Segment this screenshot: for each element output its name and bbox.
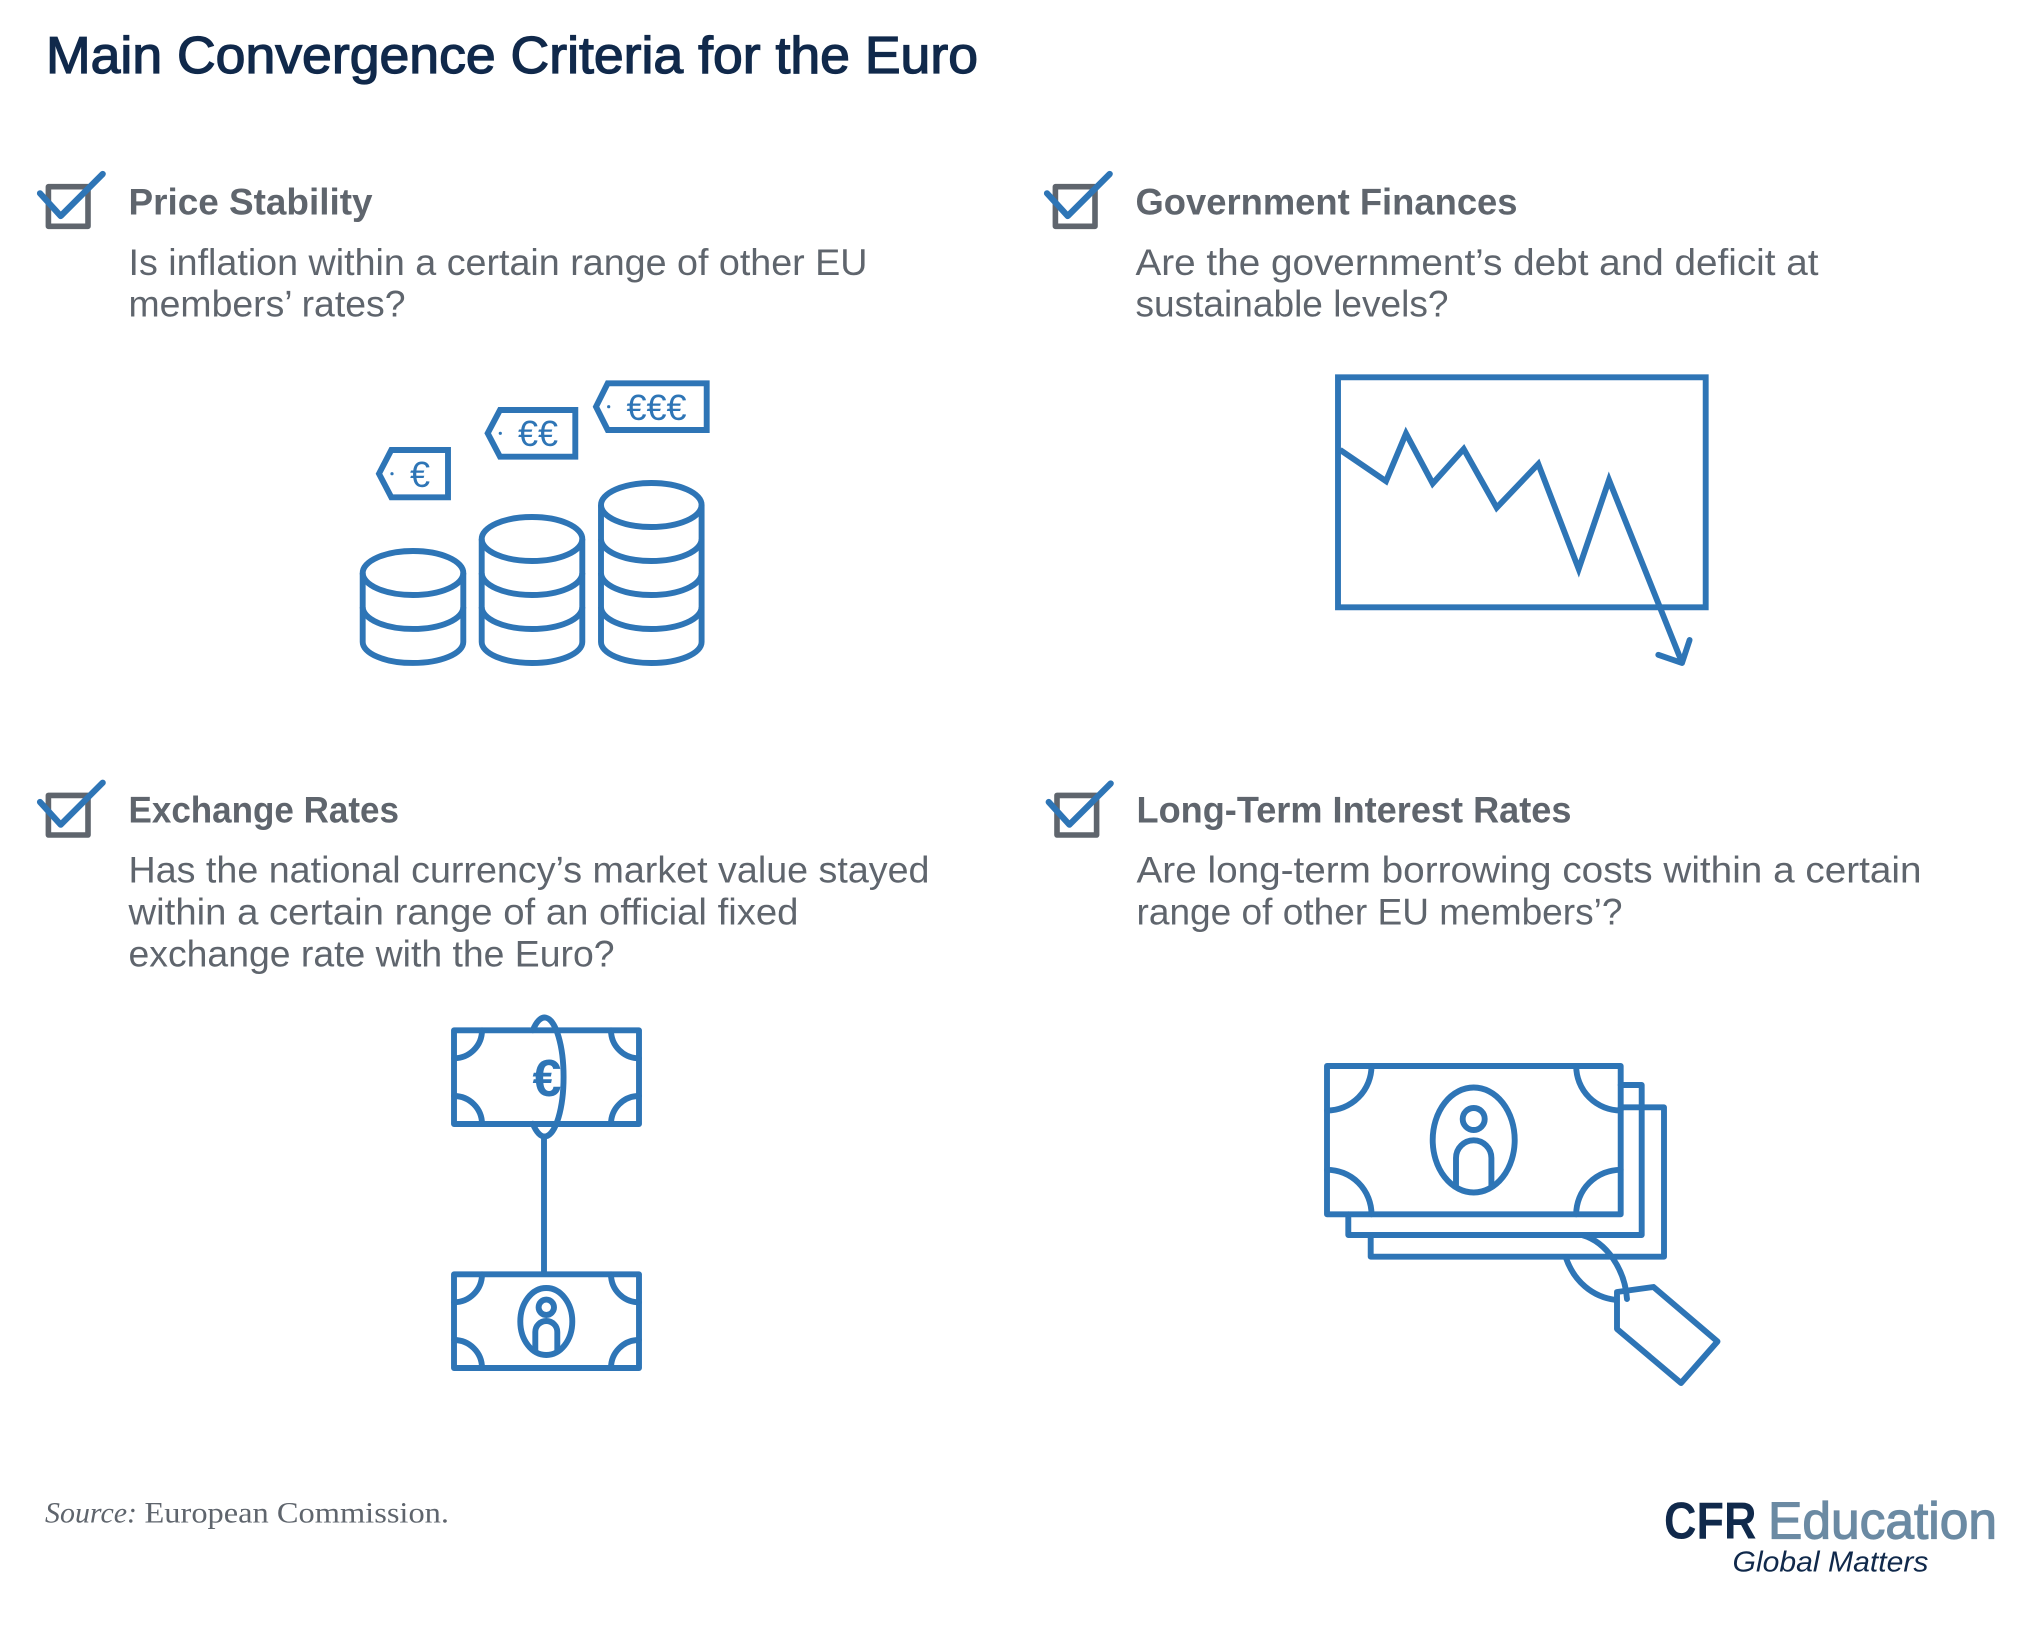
source note: European Commission. <box>144 1497 449 1530</box>
heading: price stability: Price Stability <box>128 181 373 222</box>
text block: price stability question <box>128 242 868 325</box>
source note: Source: <box>45 1497 137 1530</box>
source note <box>45 1497 449 1530</box>
panel: government finances <box>1047 174 1819 663</box>
logo: CFR Education Global Matters: Global Matters <box>1732 1547 1928 1579</box>
text block: exchange rates question: exchange rate with the Euro? <box>128 934 614 974</box>
icon: checkbox <box>1049 784 1111 835</box>
icon: one euro tag: € <box>410 454 430 495</box>
chart icon: falling line with arrow <box>1338 377 1706 663</box>
title: Main Convergence Criteria for the Euro <box>46 27 978 85</box>
icon: checkbox <box>1047 174 1110 226</box>
logo: CFR Education Global Matters: Education <box>1768 1492 1997 1550</box>
logo: CFR Education Global Matters: CFR <box>1664 1492 1756 1550</box>
icon: tall coin stack <box>601 483 702 663</box>
panel: long-term interest rates <box>1049 784 1922 1383</box>
text block: exchange rates question: Has the national currency’s market value stayed <box>128 850 930 891</box>
icon: small coin stack <box>363 551 463 663</box>
icon: euro note pegged to national banknote <box>454 1018 639 1368</box>
icon: euro banknote: € <box>533 1050 561 1108</box>
text block: long-term interest rates question <box>1136 850 1922 932</box>
text block: price stability question: members’ rates? <box>128 284 406 325</box>
text block: exchange rates question: within a certain range of an official fixed <box>127 891 798 932</box>
icon: two euro tag: €€ <box>518 413 558 454</box>
heading: government finances: Government Finances <box>1136 181 1518 222</box>
logo: CFR Education Global Matters <box>1664 1492 1997 1579</box>
icon: checkbox <box>40 174 103 226</box>
connector line <box>541 1135 547 1274</box>
icon: one euro tag <box>379 450 448 497</box>
text block: long-term interest rates question: range of other EU members’? <box>1136 891 1622 932</box>
text block: government finances question: Are the government’s debt and deficit at <box>1136 242 1819 283</box>
text block: long-term interest rates question: Are long-term borrowing costs within a certain <box>1136 850 1922 891</box>
icon: national banknote <box>454 1274 639 1368</box>
text block: exchange rates question <box>127 850 930 974</box>
icon: three euro tag: €€€ <box>626 387 687 428</box>
icon: two euro tag <box>488 410 575 457</box>
text block: government finances question: sustainable levels? <box>1136 284 1448 325</box>
icon: euro banknote <box>454 1018 639 1137</box>
icon: checkbox <box>40 783 103 835</box>
panel: exchange rates <box>40 783 930 1368</box>
text block: government finances question <box>1136 242 1819 325</box>
panel: price stability <box>40 174 868 663</box>
heading: long-term interest rates: Long-Term Interest Rates <box>1136 789 1572 830</box>
icon: medium coin stack <box>482 517 582 663</box>
icon: coin stacks with price tags <box>363 383 707 663</box>
text block: price stability question: Is inflation within a certain range of other EU <box>128 242 868 283</box>
heading: exchange rates: Exchange Rates <box>128 789 399 830</box>
icon: stack of banknotes with price tag <box>1327 1066 1718 1383</box>
icon: three euro tag <box>596 383 707 430</box>
